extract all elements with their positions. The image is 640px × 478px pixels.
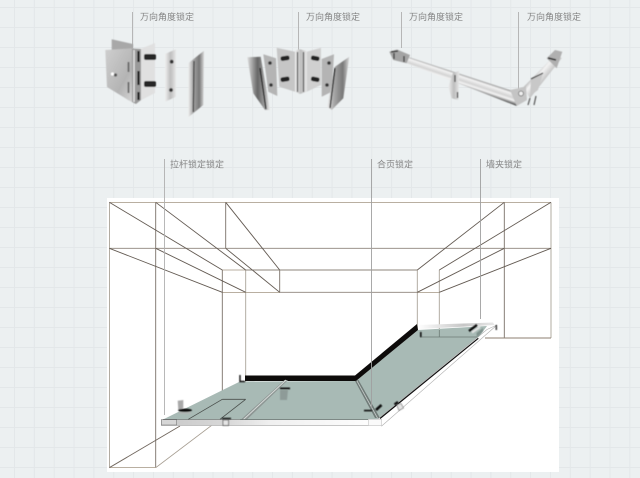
glass floor panel <box>163 326 487 420</box>
label: 万向角度锁定 3 <box>402 11 463 48</box>
clamp: left <box>178 400 192 414</box>
clamp: back corner <box>240 375 245 382</box>
label: 万向角度锁定 2 <box>298 11 360 50</box>
label: 万向角度锁定 2: 万向角度锁定 <box>306 11 360 22</box>
product: exploded hinge one <box>105 39 204 117</box>
label: 万向角度锁定 4 <box>518 11 581 93</box>
fitting: diagonal rail <box>394 402 404 410</box>
label: 万向角度锁定 1: 万向角度锁定 <box>140 11 194 22</box>
diagonal rail <box>368 325 497 426</box>
bottom rail <box>161 420 381 426</box>
label: 拉杆锁定锁定: 拉杆锁定锁定 <box>170 158 224 170</box>
label: 万向角度锁定 1 <box>132 11 194 48</box>
product: exploded hinge two <box>247 48 349 110</box>
label: 墙夹锁定: 墙夹锁定 <box>486 158 522 170</box>
label: 万向角度锁定 3: 万向角度锁定 <box>409 11 463 22</box>
fitting: bottom rail <box>222 418 231 426</box>
top right rail <box>418 322 494 329</box>
lines seen through glass <box>188 330 477 419</box>
wireframe room lines <box>109 202 551 468</box>
clamp: centre handle <box>280 388 290 400</box>
label: 万向角度锁定 4: 万向角度锁定 <box>527 11 581 22</box>
product: support bar <box>389 50 562 106</box>
glass hinge strips <box>241 380 380 420</box>
panel: room diagram <box>105 11 581 472</box>
clamp fittings <box>178 325 497 426</box>
clamp: corner <box>364 405 382 411</box>
black top track <box>245 324 418 381</box>
panel background <box>107 198 559 472</box>
clamp: top right <box>420 325 497 338</box>
label: 合页锁定: 合页锁定 <box>377 158 413 170</box>
